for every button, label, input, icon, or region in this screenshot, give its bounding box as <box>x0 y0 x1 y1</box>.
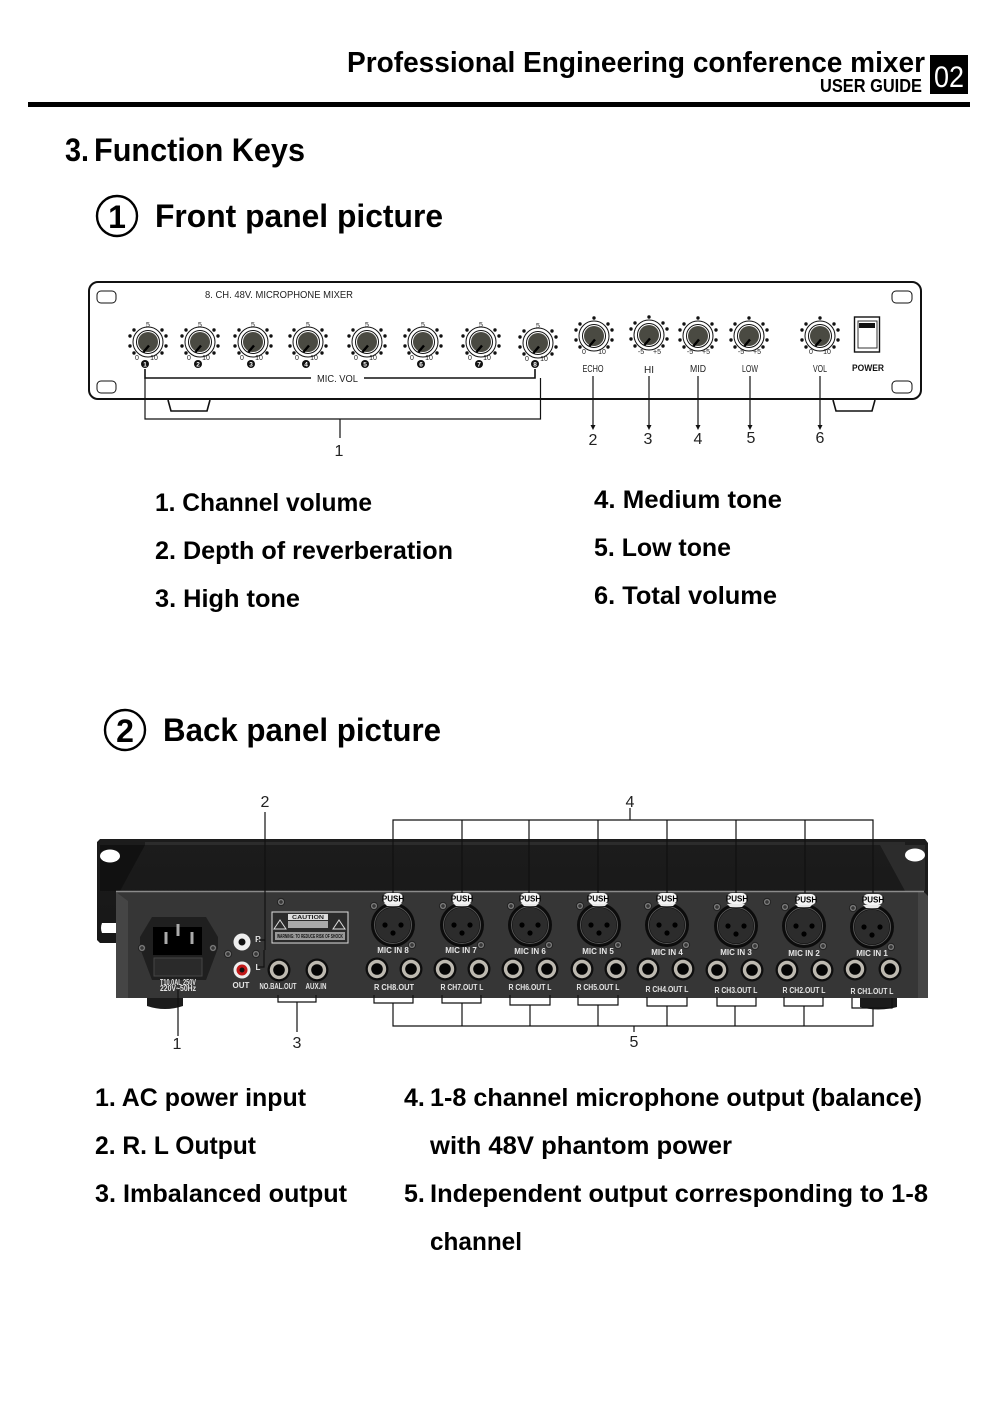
callout 5: independent outputs: 5 <box>630 1034 639 1051</box>
back panel legend left: 3. Imbalanced output <box>95 1180 348 1208</box>
callout arrows 2-6 <box>589 376 825 449</box>
header rule <box>28 102 970 107</box>
model label: 8. CH. 48V. MICROPHONE MIXER <box>205 290 353 301</box>
MIC IN labels: MIC IN 5 <box>582 947 614 956</box>
channel knobs: 5 <box>306 322 310 329</box>
callout 4: microphone outputs <box>393 794 873 893</box>
power inlet <box>138 917 218 993</box>
rubber feet <box>147 998 897 1010</box>
RCA outputs: OUT <box>233 981 250 990</box>
channel knobs: 10 <box>483 355 491 362</box>
tone knobs: +5 <box>753 349 761 356</box>
channel knobs: 0 <box>354 355 358 362</box>
front panel diagram <box>89 282 921 460</box>
PUSH tabs <box>382 893 884 905</box>
front panel legend right: 4. Medium tone <box>594 486 782 514</box>
back panel legend right: 1-8 channel microphone output (balance) <box>430 1084 922 1112</box>
jack labels: R CH6.OUT L <box>508 983 552 992</box>
jack labels: R CH1.OUT L <box>850 987 894 996</box>
RCA outputs <box>224 934 261 990</box>
callout 1: 1 <box>335 443 344 460</box>
section heading: Function Keys <box>94 132 305 168</box>
callout 3: imbalanced output <box>278 995 316 1052</box>
tone knobs: -5 <box>738 349 744 356</box>
PUSH tabs: PUSH <box>587 894 609 904</box>
tone knobs: +5 <box>653 349 661 356</box>
power inlet: T10.0AL 250V <box>160 978 196 987</box>
channel number badges: 7 <box>477 362 481 368</box>
MIC IN labels: MIC IN 3 <box>720 948 752 957</box>
XLR mic inputs <box>370 902 895 951</box>
channel knobs: 10 <box>540 356 548 363</box>
MIC VOL bracket: MIC. VOL <box>317 374 358 385</box>
channel number badges: 8 <box>533 362 537 368</box>
tone knobs: 0 <box>809 349 813 356</box>
tone knobs: +5 <box>702 349 710 356</box>
callout 1: power input <box>173 990 182 1053</box>
callout 2: RL output <box>258 794 270 967</box>
PUSH tabs: PUSH <box>382 894 404 904</box>
power switch: POWER <box>852 363 884 373</box>
front panel legend right: 6. Total volume <box>594 582 777 610</box>
jack labels: R CH3.OUT L <box>714 986 758 995</box>
channel knobs: 0 <box>240 355 244 362</box>
back panel legend right: Independent output corresponding to 1-8 <box>430 1180 928 1208</box>
channel knobs: 10 <box>425 355 433 362</box>
channel knobs: 0 <box>468 355 472 362</box>
jack labels: AUX.IN <box>306 982 327 991</box>
callout arrows 2-6: 3 <box>644 431 653 448</box>
channel knobs: 5 <box>421 322 425 329</box>
MIC IN labels: MIC IN 4 <box>651 948 683 957</box>
RCA outputs: L <box>256 963 261 972</box>
rack feet <box>168 400 875 411</box>
PUSH tabs: PUSH <box>795 896 817 904</box>
page number badge: 02 <box>934 61 964 94</box>
tone knobs: -5 <box>687 349 693 356</box>
faceplate outline <box>89 282 921 399</box>
caution label: WARNING: TO REDUCE RISK OF SHOCK <box>277 934 343 940</box>
channel knobs: 0 <box>187 355 191 362</box>
tone labels: HI <box>644 365 654 376</box>
subheading: front panel: 1 <box>108 199 126 235</box>
tone knobs: 10 <box>598 349 606 356</box>
back panel legend right: with 48V phantom power <box>429 1132 732 1160</box>
callout 1: power input: 1 <box>173 1036 182 1053</box>
MIC IN labels: MIC IN 8 <box>377 946 409 955</box>
tone labels: ECHO <box>582 364 604 375</box>
channel knobs: 0 <box>295 355 299 362</box>
MIC VOL bracket <box>145 369 535 385</box>
channel number badges: 1 <box>143 362 147 368</box>
back panel legend right: channel <box>430 1228 522 1256</box>
channel number badges <box>141 360 539 368</box>
callout 3: imbalanced output: 3 <box>293 1035 302 1052</box>
PUSH tabs: PUSH <box>656 894 678 904</box>
PUSH tabs: PUSH <box>519 894 541 904</box>
tone knobs <box>574 315 840 356</box>
channel number badges: 3 <box>249 362 253 368</box>
channel knobs: 10 <box>255 355 263 362</box>
subheading: back panel: Back panel picture <box>163 712 441 748</box>
chassis screws <box>277 898 771 906</box>
channel knobs: 5 <box>536 323 540 330</box>
jack labels: R CH5.OUT L <box>576 983 620 992</box>
front panel legend left: 1. Channel volume <box>155 489 372 517</box>
callout 2: RL output: 2 <box>261 794 270 811</box>
channel knobs: 10 <box>150 355 158 362</box>
back panel legend right: 4. <box>404 1084 425 1112</box>
PUSH tabs: PUSH <box>451 894 473 904</box>
channel number badges: 6 <box>419 362 423 368</box>
channel number badges: 4 <box>304 362 308 368</box>
jack labels: R CH7.OUT L <box>440 983 484 992</box>
caution label <box>272 912 348 943</box>
power switch <box>852 317 884 373</box>
channel knobs: 10 <box>369 355 377 362</box>
subheading: back panel: 2 <box>116 713 134 749</box>
MIC IN labels: MIC IN 7 <box>445 946 477 955</box>
subheading: front panel: Front panel picture <box>155 198 443 234</box>
mounting slots <box>97 291 912 393</box>
section heading: 3. <box>65 132 89 168</box>
channel knobs: 5 <box>479 322 483 329</box>
callout 4: microphone outputs: 4 <box>626 794 635 811</box>
channel knobs <box>128 322 558 363</box>
back panel photo <box>97 839 928 1010</box>
channel knobs: 10 <box>310 355 318 362</box>
header title: Professional Engineering conference mixer <box>347 47 925 79</box>
back panel legend right <box>404 1084 928 1256</box>
channel number badges: 5 <box>363 362 367 368</box>
back panel legend right: 5. <box>404 1180 425 1208</box>
callout 5: independent outputs <box>374 995 892 1051</box>
front panel legend left <box>155 489 453 613</box>
channel number badges: 2 <box>196 362 200 368</box>
channel knobs: 5 <box>146 322 150 329</box>
back panel legend left: 2. R. L Output <box>95 1132 257 1160</box>
tone knobs: -5 <box>638 349 644 356</box>
jack labels: R CH2.OUT L <box>782 986 826 995</box>
front panel legend right: 5. Low tone <box>594 534 731 562</box>
RCA outputs: R <box>255 935 261 944</box>
callout arrows 2-6: 6 <box>816 430 825 447</box>
channel knobs: 5 <box>251 322 255 329</box>
power inlet: 220V~50Hz <box>160 984 196 993</box>
channel knobs: 10 <box>202 355 210 362</box>
front panel legend left: 2. Depth of reverberation <box>155 537 453 565</box>
tone labels: VOL <box>813 364 827 375</box>
PUSH tabs: PUSH <box>726 894 748 904</box>
tone labels <box>582 364 827 376</box>
tone knobs: 0 <box>582 349 586 356</box>
jack labels: R CH8.OUT <box>374 983 414 992</box>
jack labels <box>260 982 894 996</box>
channel knobs: 5 <box>365 322 369 329</box>
header subtitle: USER GUIDE <box>820 76 922 96</box>
callout arrows 2-6: 5 <box>747 430 756 447</box>
back panel legend left <box>95 1084 348 1208</box>
PUSH tabs: PUSH <box>862 896 884 904</box>
channel knobs: 0 <box>410 355 414 362</box>
MIC IN labels: MIC IN 1 <box>856 949 888 958</box>
rack ear and top cover <box>97 839 928 998</box>
MIC IN labels: MIC IN 2 <box>788 949 820 958</box>
quarter-inch jacks <box>268 958 902 982</box>
jack labels: R CH4.OUT L <box>646 985 689 994</box>
MIC IN labels: MIC IN 6 <box>514 947 546 956</box>
callout 1 <box>145 378 540 460</box>
front panel legend right <box>594 486 782 610</box>
callout arrows 2-6: 4 <box>694 431 703 448</box>
front panel legend left: 3. High tone <box>155 585 300 613</box>
channel knobs: 0 <box>525 356 529 363</box>
caution label: CAUTION <box>292 915 324 921</box>
MIC IN labels <box>377 946 888 958</box>
jack labels: NO.BAL.OUT <box>260 982 297 991</box>
tone labels: MID <box>690 364 706 375</box>
callout arrows 2-6: 2 <box>589 432 598 449</box>
tone knobs: 10 <box>823 349 831 356</box>
channel knobs: 0 <box>135 355 139 362</box>
rear face <box>116 892 928 998</box>
tone labels: LOW <box>742 364 758 375</box>
back panel legend left: 1. AC power input <box>95 1084 307 1112</box>
top cover shading <box>145 842 925 891</box>
mounting holes <box>100 848 925 933</box>
channel knobs: 5 <box>198 322 202 329</box>
